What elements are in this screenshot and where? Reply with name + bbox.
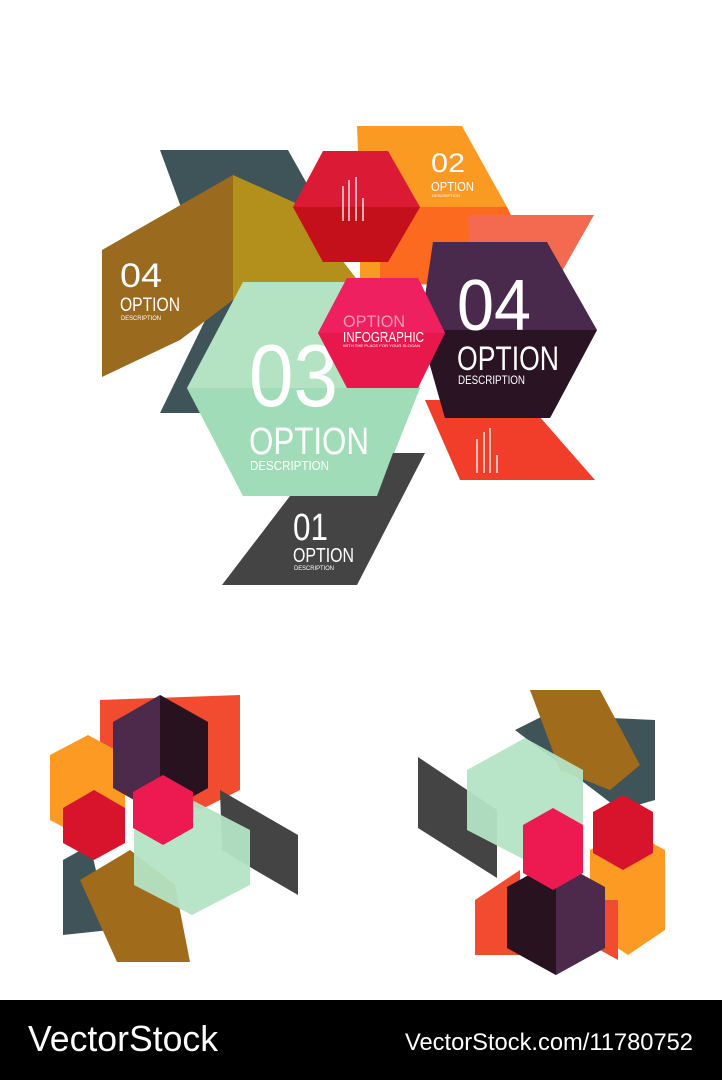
- panel: orange-red ribbon: [425, 215, 595, 480]
- panel: option 03 mint hex: OPTION: [249, 421, 369, 463]
- panel: option 01 dark grey: DESCRIPTION: [294, 566, 334, 572]
- bottom-left cluster: [50, 695, 298, 962]
- panel: option 02 orange: [357, 126, 530, 285]
- panel: infographic pink hex: OPTION: [343, 312, 405, 331]
- bottom-right cluster: [418, 690, 665, 975]
- panel: option 01 dark grey: OPTION: [293, 545, 354, 567]
- panel: option 01 dark grey: 01: [293, 507, 328, 549]
- main infographic: [102, 126, 597, 585]
- panel: option 04 brown: 04: [120, 257, 162, 295]
- panel: option 03 mint hex: 03: [249, 326, 338, 425]
- panel: option 02 orange: 02: [431, 148, 465, 178]
- footer bar: VectorStock.com/11780752: [405, 1029, 693, 1056]
- panel: option 02 orange: DESCRIPTION: [432, 193, 460, 198]
- footer bar: [0, 1000, 722, 1080]
- panel: option 03 mint hex: DESCRIPTION: [250, 458, 329, 473]
- panel: option 03 mint hex: [187, 282, 420, 496]
- panel: option 04 brown: DESCRIPTION: [121, 316, 161, 322]
- panel: red hex with bars: [293, 151, 420, 262]
- panel: option 04 purple hex: DESCRIPTION: [458, 373, 525, 387]
- panel: option 04 brown: OPTION: [120, 295, 180, 316]
- panel: option 04 purple hex: 04: [457, 266, 531, 346]
- icon: bars: [343, 177, 363, 221]
- panel: infographic pink hex: WITH THE PLACE FOR YOUR SLOGAN: [343, 343, 420, 348]
- panel: option 04 brown: [102, 175, 233, 377]
- panel: infographic pink hex: [318, 278, 445, 388]
- panel: slate ribbon: [160, 150, 330, 413]
- panel: option 02 orange: OPTION: [431, 179, 474, 194]
- panel: option 01 dark grey: [222, 453, 425, 585]
- footer bar: VectorStock: [28, 1018, 219, 1059]
- panel: infographic pink hex: INFOGRAPHIC: [343, 329, 424, 346]
- panel: option 04 purple hex: OPTION: [457, 340, 559, 378]
- icon: bars: [477, 428, 497, 473]
- panel: option 04 purple hex: [420, 242, 597, 418]
- panel: gold triangle: [233, 175, 365, 300]
